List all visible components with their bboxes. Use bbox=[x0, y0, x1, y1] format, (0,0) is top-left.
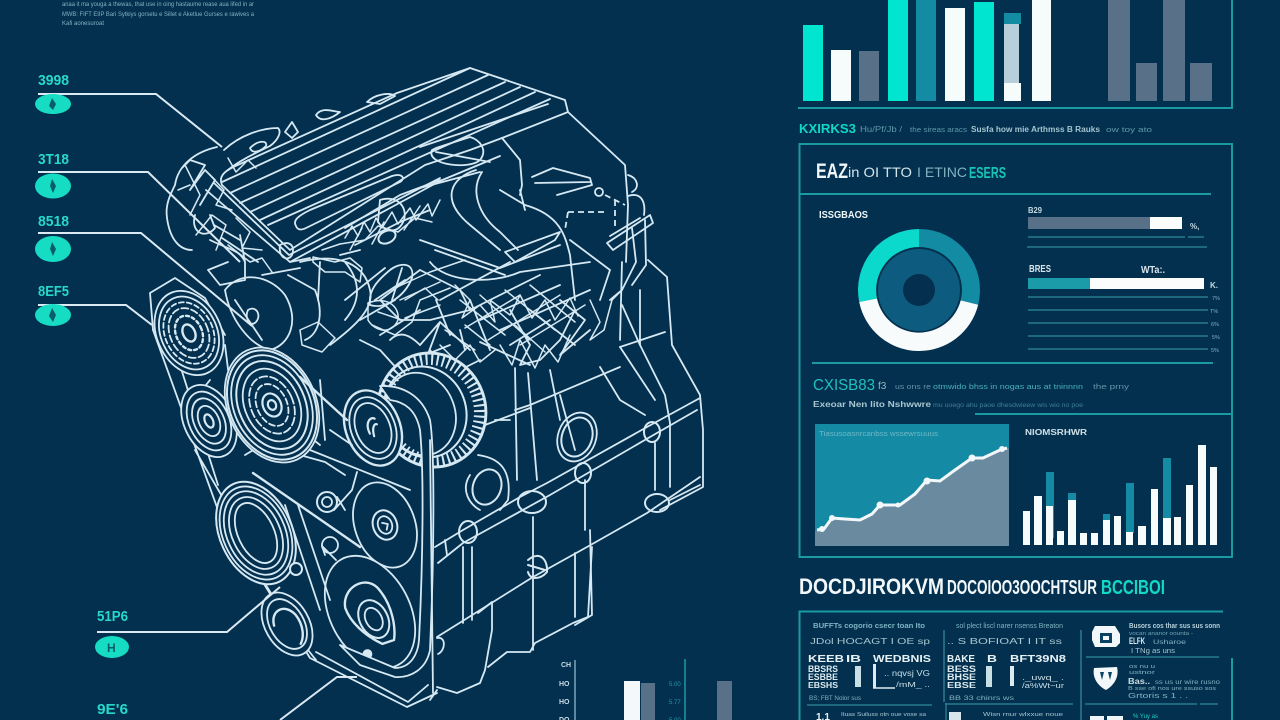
intake pipes and wiring bbox=[280, 137, 610, 392]
section heading: CXISB83 bbox=[813, 377, 875, 394]
section heading: f3 bbox=[878, 381, 887, 392]
section heading: Exeoar Nen lito Nshwwre bbox=[813, 400, 932, 409]
info block 1: vocan ananor oounta - bbox=[1129, 631, 1193, 637]
info block 2: B sse ofi nos ure ssuso sos bbox=[1128, 686, 1216, 692]
bottom centre bar chart: HO bbox=[559, 699, 570, 706]
callout: label 3 bbox=[35, 213, 71, 262]
subtitle row: KXIRKS3 bbox=[799, 121, 856, 136]
top-left caption text bbox=[62, 1, 255, 27]
subtitle row: Susfa how mie Arthmss B Rauks bbox=[971, 125, 1101, 134]
data rows bbox=[1028, 296, 1220, 354]
pulley: large crank bbox=[207, 332, 337, 478]
engine line drawing bbox=[141, 68, 703, 707]
subtitle row: ow toy ato bbox=[1106, 127, 1152, 134]
spec block 1: WEDBNIS bbox=[873, 654, 931, 665]
data rows: 6% bbox=[1211, 322, 1219, 328]
footer row: % Yuy as bbox=[1133, 714, 1158, 720]
spec block 2: /a%Wt~ur bbox=[1022, 683, 1065, 690]
subtitle row bbox=[799, 121, 1152, 136]
area chart: Tiasusoasnrcanbss wssewrsuuus bbox=[819, 431, 939, 438]
area chart bbox=[815, 424, 1009, 546]
section heading: the prny bbox=[1093, 384, 1130, 391]
bottom centre bar chart: 5.77 bbox=[669, 700, 681, 706]
pulley: bottom small bbox=[251, 584, 323, 664]
spec block 1: JDol HOCAGT I OE sp bbox=[810, 637, 931, 646]
gear bbox=[361, 337, 503, 483]
callout: label 4: 8EF5 bbox=[38, 283, 69, 300]
section heading: us ons re bbox=[895, 384, 931, 391]
progress bar 2: WTa:. bbox=[1141, 265, 1165, 276]
spec block 2: BAKE bbox=[947, 654, 975, 665]
cylinder head and right tower bbox=[502, 112, 703, 510]
spec block 1 bbox=[808, 623, 931, 702]
pulley: ring lower left bbox=[201, 469, 311, 597]
info block 2: os nu u bbox=[1129, 664, 1155, 670]
subtitle row: Hu/Pf/Jb / bbox=[860, 125, 903, 134]
section heading: otmwido bhss in nogas aus at tninnnn bbox=[933, 384, 1083, 391]
callout: label 5: 51P6 bbox=[97, 608, 128, 625]
spec block 1: BBSRS bbox=[808, 664, 838, 674]
block rails and bolts bbox=[430, 347, 700, 700]
icon: document bbox=[1092, 626, 1120, 647]
info block 2: Grtoris s 1 . . bbox=[1128, 693, 1188, 700]
info block 1: ELFK bbox=[1129, 636, 1145, 646]
progress bar 1: B29 bbox=[1028, 206, 1043, 215]
spec block 1: EBSHS bbox=[808, 681, 839, 690]
top-left caption text: Kafi aonesuroat bbox=[62, 20, 104, 27]
icon: shield bbox=[1094, 667, 1118, 690]
section heading: mu uoego ahu paoe dhesdwieew wis wio no poe bbox=[933, 402, 1083, 409]
bottom section heading: BCCIBOI bbox=[1101, 577, 1165, 599]
column chart bbox=[1023, 428, 1217, 545]
panel heading bbox=[816, 160, 1006, 183]
pulley: top left bbox=[141, 280, 237, 386]
subtitle row: the sireas aracs bbox=[910, 127, 968, 134]
spec block 1: ESBBE bbox=[808, 672, 838, 682]
spec block 1: KEEB bbox=[808, 654, 844, 665]
pulley: right middle bbox=[342, 473, 428, 577]
pulley: small left bbox=[170, 376, 248, 466]
progress bar 1 bbox=[1027, 206, 1207, 247]
tensioners bbox=[253, 377, 360, 610]
callout: label 2: 3T18 bbox=[38, 151, 69, 168]
progress bar 2 bbox=[1028, 264, 1218, 290]
top-left caption text: anaa it ma youga a thewas, that use in oing hastaume rease aua lifed in ar bbox=[62, 1, 255, 8]
left manifold and alternator bbox=[150, 147, 320, 385]
valve cover bbox=[206, 68, 568, 262]
spec block 1: .. nqvsj VG bbox=[884, 669, 930, 678]
callout leader lines bbox=[38, 94, 357, 720]
footer row: Ituas Suiluss otn oue vose sa bbox=[841, 712, 927, 718]
panel heading: in OI TTO bbox=[848, 164, 912, 180]
progress bar 2: K. bbox=[1210, 281, 1218, 290]
spec block 2: BESS bbox=[947, 664, 976, 674]
spec block 1: BS; FBT Nolor sus bbox=[809, 696, 861, 702]
progress bar 1: %, bbox=[1190, 222, 1199, 231]
callout: label 4 bbox=[35, 283, 71, 326]
data rows: 7% bbox=[1212, 296, 1220, 302]
spec block 2: BB 33 chinrs ws bbox=[949, 696, 1014, 702]
bottom section heading: DOCOIOO3OOCHTSUR bbox=[947, 577, 1097, 599]
panel: main dashboard bbox=[800, 144, 1232, 557]
block outline bbox=[153, 330, 437, 707]
spec block 1: /mM_ .. bbox=[896, 682, 930, 689]
data rows: T% bbox=[1210, 309, 1218, 315]
donut heading: ISSGBAOS bbox=[819, 210, 868, 221]
pulley: toothed belt idler bbox=[333, 382, 413, 474]
bottom centre bar chart: CH bbox=[561, 662, 571, 669]
top-left caption text: MWB: FIFT EIIP Bari Sytkiys gorsetu e Sillet e Aketlue Gurses e rawives a bbox=[62, 11, 254, 18]
spec block 2: B bbox=[987, 654, 997, 665]
spec block 2 bbox=[947, 623, 1067, 702]
callout: label 6: 9E'6 bbox=[97, 701, 128, 718]
spec block 2: BFT39N8 bbox=[1010, 654, 1067, 665]
drive belt bbox=[340, 386, 433, 677]
bottom centre bar chart: 5.00 bbox=[669, 682, 681, 688]
spec block 1: IB bbox=[846, 654, 861, 665]
info block 2: ss us ur wire rusno bbox=[1155, 680, 1221, 686]
info block 2 bbox=[1128, 664, 1221, 700]
spec block 2: ._uwq_ . bbox=[1022, 675, 1064, 682]
section heading bbox=[813, 377, 1130, 409]
panel heading: ESERS bbox=[969, 165, 1006, 182]
bottom centre bar chart bbox=[559, 659, 732, 720]
top bar chart bbox=[798, 0, 1232, 108]
spec block 2: .. S BOFIOAT I IT ss bbox=[947, 637, 1062, 646]
footer row: Wisn rnur wlxxue noue bbox=[983, 712, 1063, 718]
pulley: bottom bbox=[307, 540, 433, 684]
callout: label 3: 8518 bbox=[38, 213, 69, 230]
info block 1: Busors cos thar sus sus sonn bbox=[1129, 623, 1220, 630]
mesh of hoses and brackets bbox=[178, 158, 622, 368]
callout: label 1: 3998 bbox=[38, 72, 69, 89]
info block 1 bbox=[1129, 623, 1220, 655]
data rows: 5% bbox=[1212, 335, 1220, 341]
bottom section heading: DOCDJIROKVM bbox=[799, 574, 944, 599]
callout: label 1 bbox=[35, 72, 71, 114]
spec block 2: EBSE bbox=[947, 681, 977, 690]
footer row bbox=[816, 712, 1158, 720]
progress bar 2: BRES bbox=[1029, 264, 1051, 275]
info block 2: Bas.. bbox=[1128, 677, 1150, 686]
bottom centre bar chart: HO bbox=[559, 681, 570, 688]
panel heading: I ETINC bbox=[917, 164, 967, 180]
panel: bottom details bbox=[800, 612, 1232, 720]
panel heading: EAZ bbox=[816, 160, 848, 183]
donut chart bbox=[858, 229, 980, 351]
callout: label 2 bbox=[35, 151, 71, 198]
spec block 2: sol plect liscl narer nsenss Breaton bbox=[956, 623, 1063, 630]
callout: label 5 bbox=[95, 608, 129, 658]
bottom section heading bbox=[799, 574, 1165, 599]
info block 1: Usharoe bbox=[1153, 640, 1187, 646]
column chart: NIOMSRHWR bbox=[1025, 428, 1087, 437]
info block 2: ustnor bbox=[1129, 670, 1156, 676]
spec block 1: BUFFTs cogorio csecr toan Ito bbox=[813, 623, 925, 630]
callout: label 5: H bbox=[107, 641, 116, 655]
info block 1: I TNg as uns bbox=[1131, 648, 1176, 655]
spec block 2: BHSE bbox=[947, 672, 976, 682]
data rows: 5% bbox=[1211, 348, 1219, 354]
